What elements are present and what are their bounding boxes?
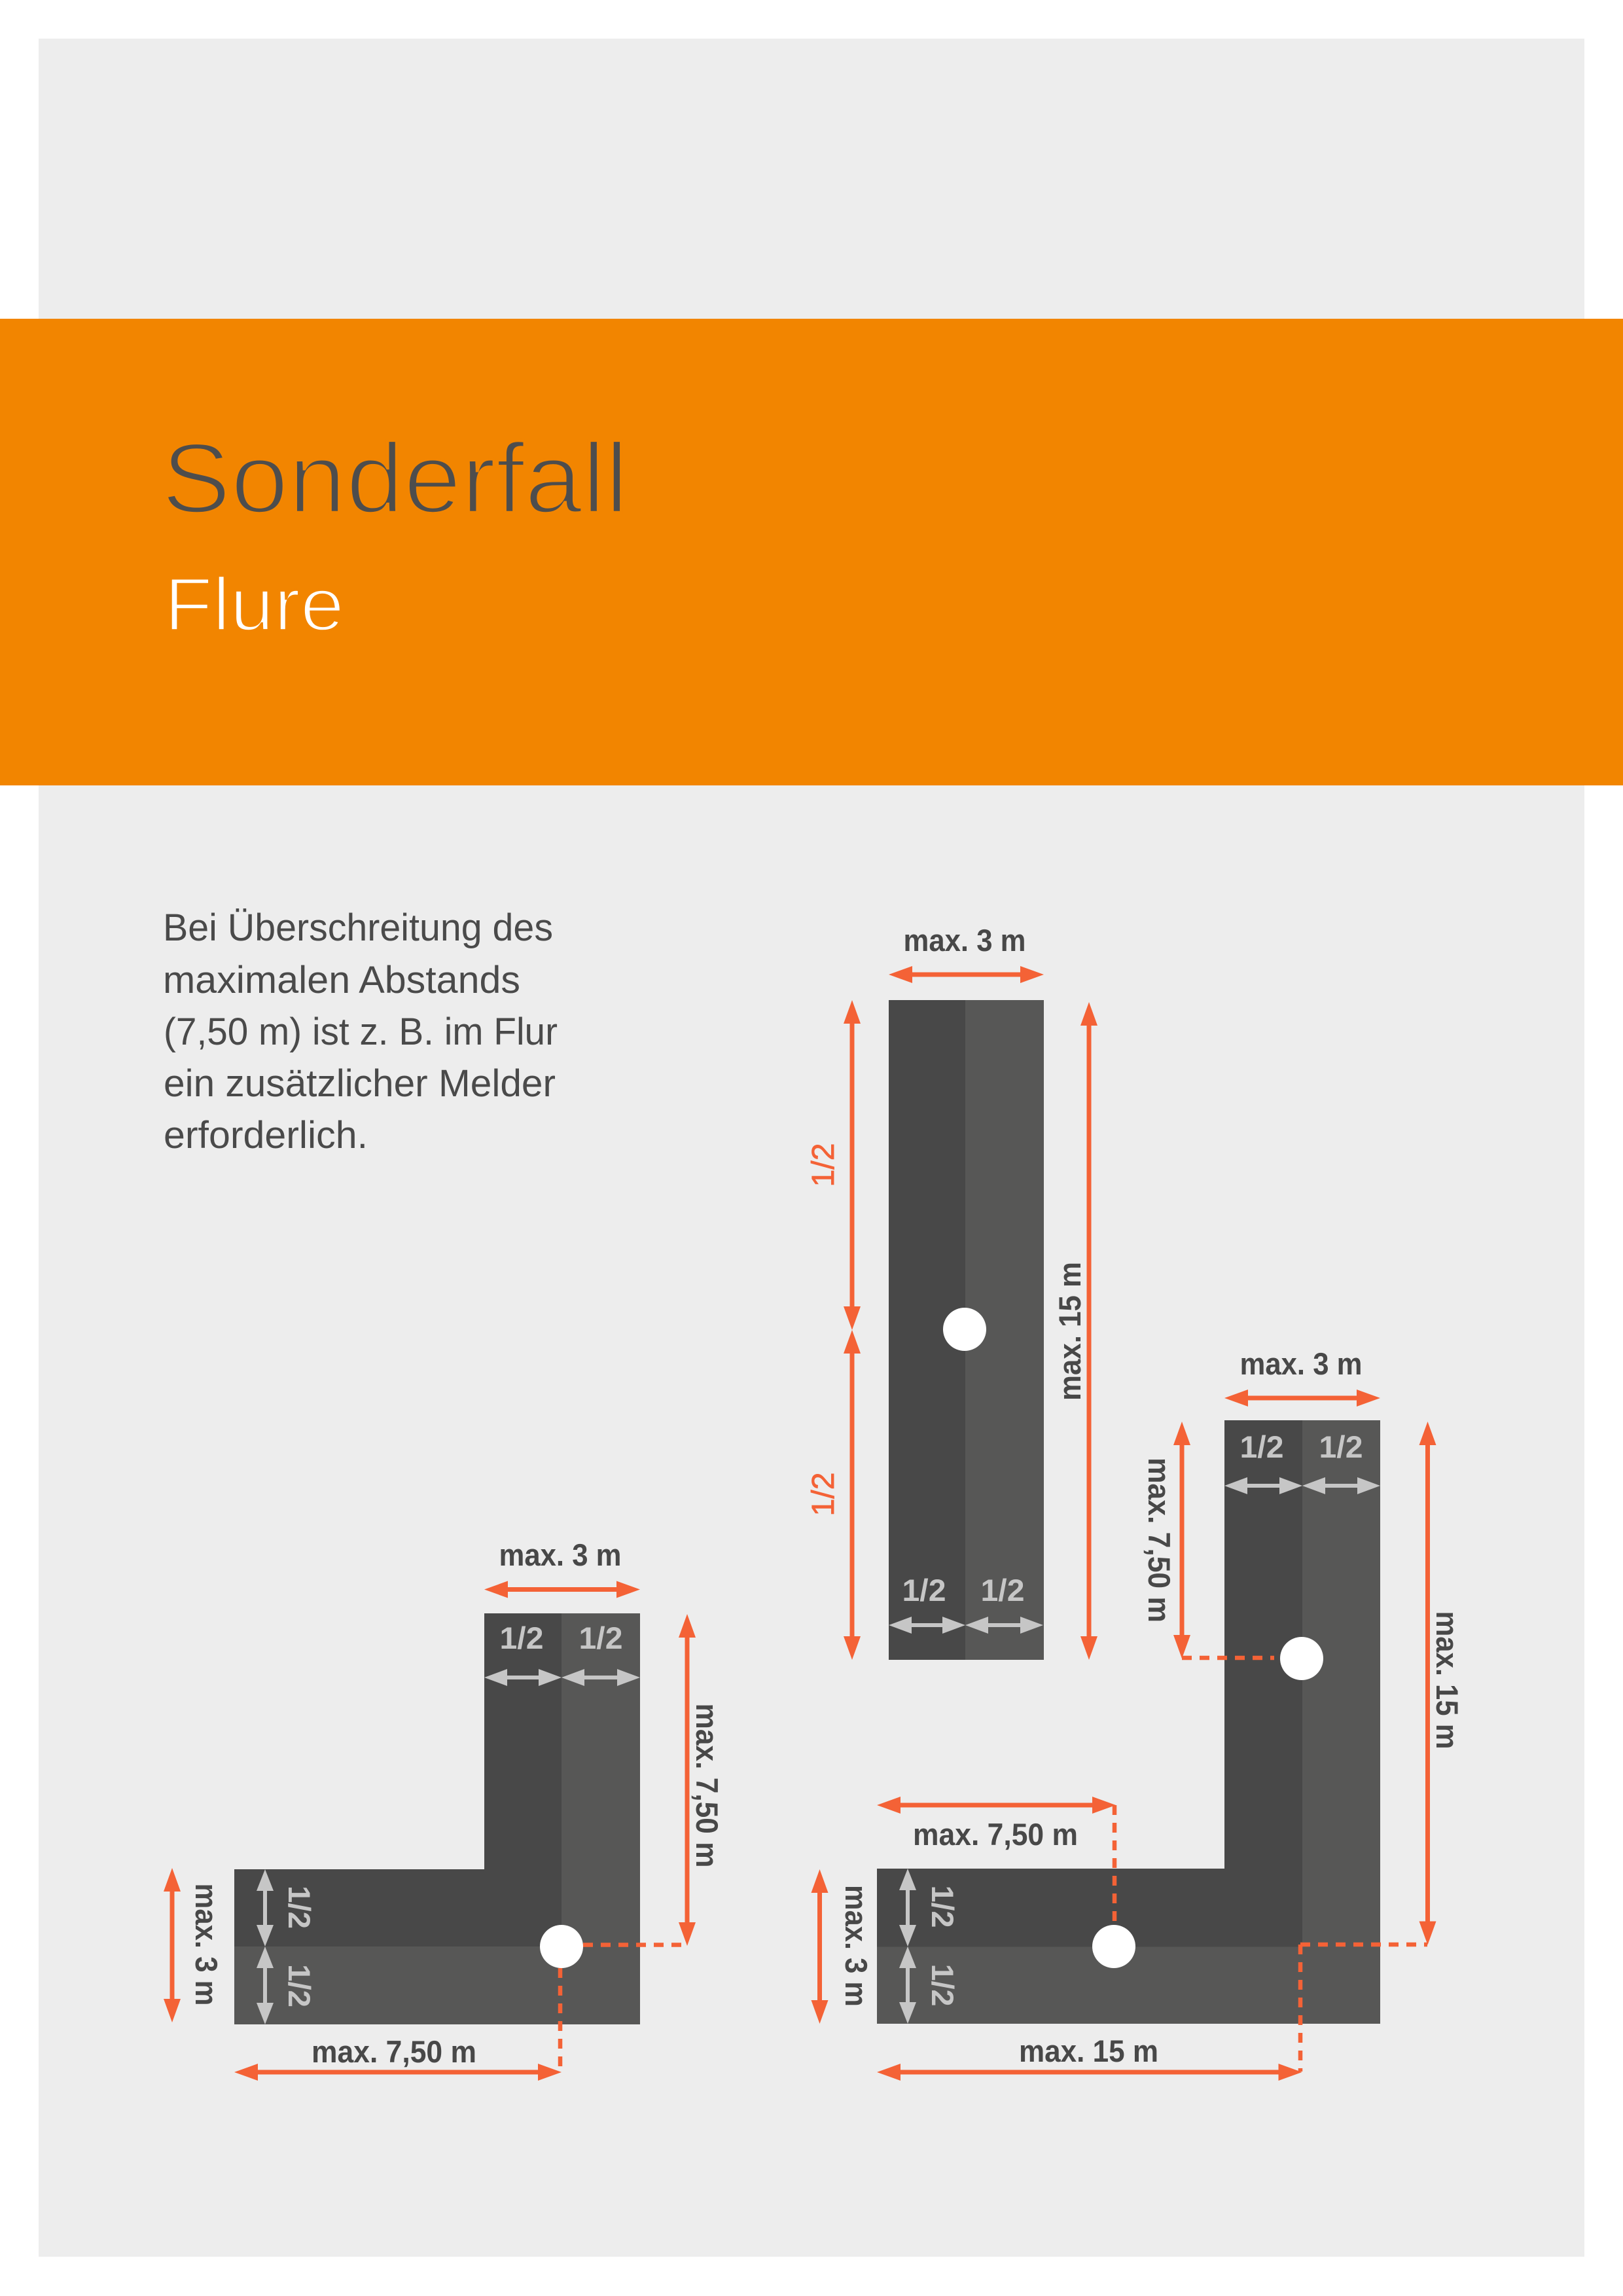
dashed guide: to upper left arrow <box>1182 1656 1274 1660</box>
arrow: width <box>1224 1390 1380 1407</box>
orange title band <box>0 319 1623 785</box>
grey arrow: right half <box>965 1617 1043 1634</box>
label: right half: 1/2 <box>1319 1429 1363 1464</box>
label: upper half: 1/2 <box>925 1885 960 1928</box>
text block: explanation: erforderlich. <box>164 1114 368 1157</box>
grey arrow: lower half <box>899 1946 916 2024</box>
diagram: L-shaped corridor, corner detector <box>164 1537 724 2081</box>
text block: explanation: (7,50 m) ist z. B. im Flur <box>164 1011 558 1053</box>
diagram: L-shaped corridor, two detectors <box>812 1346 1465 2081</box>
text block: explanation <box>163 906 558 1157</box>
detector <box>943 1308 986 1351</box>
arrow: horizontal distance <box>234 2064 562 2081</box>
label: left half: 1/2 <box>1240 1429 1284 1464</box>
label: length: max. 15 m <box>1052 1262 1087 1401</box>
dashed guide: to bottom arrow <box>558 1968 562 2072</box>
arrow: width <box>889 966 1044 983</box>
label: right half: 1/2 <box>980 1573 1025 1607</box>
arrow: total horizontal <box>877 2064 1302 2081</box>
label: lower half: 1/2 <box>282 1964 317 2007</box>
arrow: corridor width <box>812 1869 829 2024</box>
arrow: upper distance <box>1173 1422 1190 1659</box>
label: upper distance: max. 7,50 m <box>1142 1458 1177 1623</box>
label: vertical distance: max. 7,50 m <box>690 1703 724 1868</box>
grey arrow: right half <box>1302 1477 1380 1494</box>
corridor floor <box>234 1613 640 2024</box>
corridor floor <box>889 1000 1044 1660</box>
label: total vertical: max. 15 m <box>1430 1611 1465 1749</box>
grey arrow: left half <box>1224 1477 1302 1494</box>
corridor floor <box>877 1420 1380 2024</box>
dashed guide: to right arrow <box>583 1943 687 1947</box>
arrow: detector distance <box>877 1797 1116 1814</box>
text block: explanation: ein zusätzlicher Melder <box>164 1062 556 1105</box>
grey arrow: left half <box>484 1669 562 1686</box>
grey arrow: right half <box>562 1669 640 1686</box>
text block: explanation: Bei Überschreitung des <box>163 906 553 949</box>
arrow: length <box>1080 1002 1097 1660</box>
subtitle: Flure <box>164 563 344 647</box>
label: detector distance: max. 7,50 m <box>913 1817 1078 1852</box>
dashed guide: to bottom arrow <box>1298 1945 1302 2072</box>
text block: explanation: maximalen Abstands <box>163 959 520 1001</box>
arrow: width <box>484 1581 640 1598</box>
label: horizontal distance: max. 7,50 m <box>312 2034 476 2069</box>
label: width: max. 3 m <box>903 923 1026 958</box>
label: width: max. 3 m <box>499 1537 622 1572</box>
grey arrow: lower half <box>257 1946 274 2024</box>
label: upper half: 1/2 <box>282 1886 317 1929</box>
diagram: straight corridor <box>806 923 1097 1660</box>
label: total horizontal: max. 15 m <box>1019 2034 1158 2068</box>
label: left half: 1/2 <box>500 1621 543 1655</box>
label: lower half: 1/2 <box>806 1473 841 1516</box>
label: lower half: 1/2 <box>925 1964 960 2007</box>
title: Sonderfall <box>162 423 628 534</box>
label: corridor width: max. 3 m <box>189 1884 224 2005</box>
arrow: vertical distance <box>679 1614 696 1946</box>
label: left half: 1/2 <box>902 1573 946 1607</box>
arrow: total vertical <box>1419 1422 1436 1945</box>
detector: lower <box>1092 1925 1135 1968</box>
label: right half: 1/2 <box>579 1621 623 1655</box>
detector: upper <box>1280 1637 1323 1680</box>
grey arrow: upper half <box>257 1869 274 1946</box>
label: width: max. 3 m <box>1240 1346 1363 1381</box>
grey arrow: upper half <box>899 1869 916 1946</box>
arrow: corridor width <box>164 1868 181 2022</box>
label: corridor width: max. 3 m <box>839 1885 874 2007</box>
arrow: upper half <box>844 1000 861 1330</box>
grey arrow: left half <box>889 1617 965 1634</box>
label: upper half: 1/2 <box>806 1143 841 1187</box>
arrow: lower half <box>844 1330 861 1660</box>
dashed guide: to top horizontal arrow <box>1113 1805 1116 1926</box>
dashed guide: to right arrow <box>1300 1943 1427 1946</box>
detector <box>540 1925 583 1968</box>
